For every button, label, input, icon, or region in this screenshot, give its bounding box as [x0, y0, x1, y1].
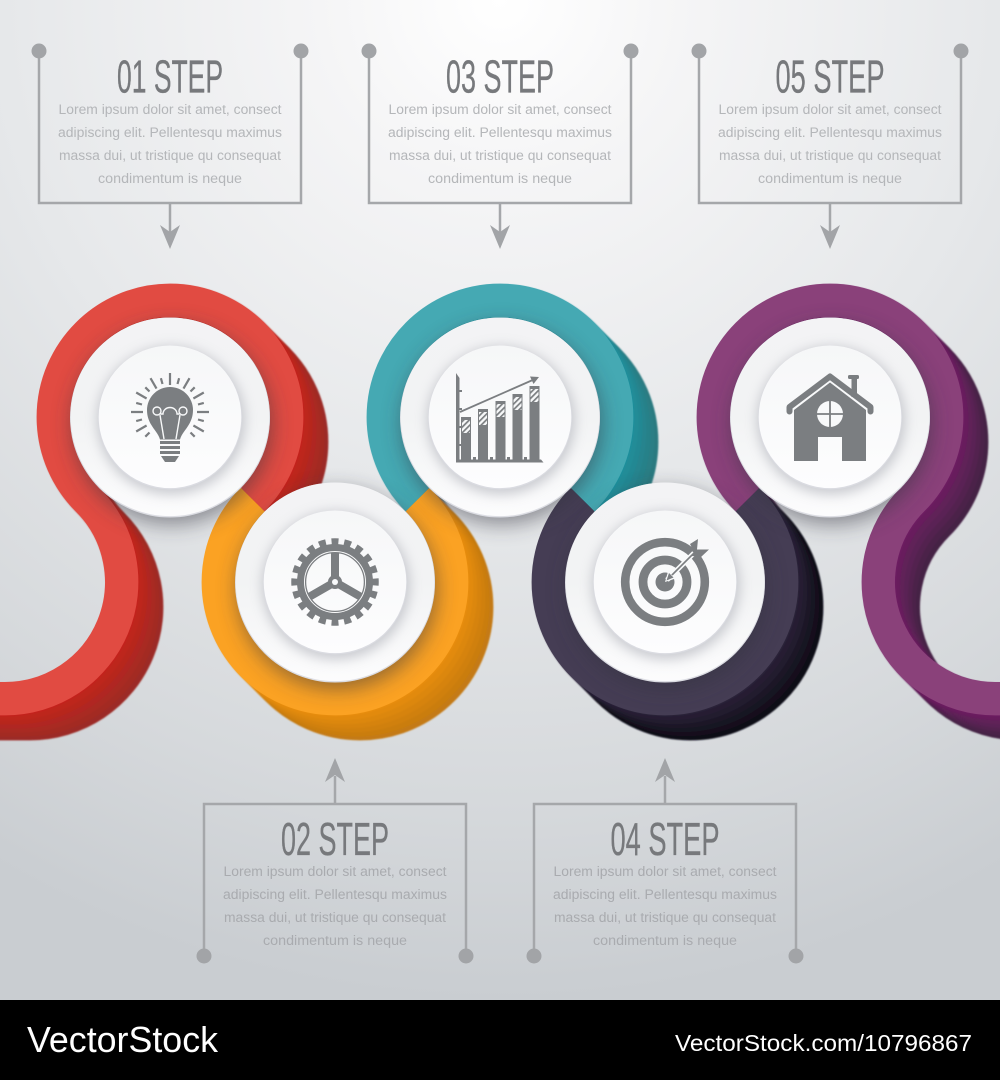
ribbon: orange — [218, 500, 452, 699]
callout: 04 step: adipiscing elit. Pellentesqu maximus — [553, 887, 777, 902]
extrusion: purple — [714, 301, 1000, 724]
callout: 03 step: Lorem ipsum dolor sit amet, consect — [388, 102, 612, 117]
callout: 01 step: adipiscing elit. Pellentesqu maximus — [58, 125, 282, 140]
extrusion: teal — [384, 301, 642, 524]
ribbon front faces — [0, 300, 1000, 699]
callout: 05 step — [692, 44, 968, 249]
disc: step 5 — [730, 318, 932, 524]
callout: 01 step: 01 STEP — [117, 50, 223, 102]
callout: 01 step: Lorem ipsum dolor sit amet, consect — [58, 102, 282, 117]
callout: 02 step — [196, 758, 474, 964]
callout: 02 step: Lorem ipsum dolor sit amet, consect — [224, 864, 447, 879]
callout: 03 step: adipiscing elit. Pellentesqu maximus — [388, 125, 612, 140]
callout: 03 step: 03 STEP — [446, 50, 554, 102]
footer bar — [0, 1000, 1000, 1080]
ribbon 3D extrusions — [0, 301, 1000, 724]
callout: 02 step: 02 STEP — [281, 813, 389, 865]
disc: step 1 — [70, 318, 272, 524]
callout: 02 step: massa dui, ut tristique qu consequat — [224, 910, 446, 925]
callout: 05 step: condimentum is neque — [758, 171, 902, 186]
callout: 01 step: condimentum is neque — [98, 171, 242, 186]
callout: 04 step — [526, 758, 804, 964]
icon: house — [790, 375, 870, 461]
extrusion: navy — [549, 500, 807, 724]
callout: 04 step: condimentum is neque — [593, 933, 737, 948]
callout: 03 step — [362, 44, 638, 249]
callout: 02 step: adipiscing elit. Pellentesqu maximus — [223, 887, 447, 902]
callout: 04 step: massa dui, ut tristique qu consequat — [554, 910, 776, 925]
ribbon: purple — [713, 300, 1000, 699]
callout: 03 step: massa dui, ut tristique qu consequat — [389, 148, 611, 163]
callout: 05 step: massa dui, ut tristique qu consequat — [719, 148, 941, 163]
callout: 05 step: 05 STEP — [776, 50, 884, 102]
ribbon: teal — [383, 300, 617, 500]
callout: 05 step: adipiscing elit. Pellentesqu maximus — [718, 125, 942, 140]
disc: step 2 — [235, 482, 437, 690]
ribbon: red — [0, 300, 287, 699]
icon: target with arrow — [625, 539, 709, 622]
callout: 01 step — [32, 44, 308, 249]
callout: 05 step: Lorem ipsum dolor sit amet, consect — [718, 102, 942, 117]
callout: 03 step: condimentum is neque — [428, 171, 572, 186]
ribbon: navy — [548, 500, 782, 699]
callout: 01 step: massa dui, ut tristique qu consequat — [59, 148, 281, 163]
icon: gear — [295, 542, 375, 622]
icon: bar chart — [456, 373, 544, 462]
footer bar: VectorStock.com/10796867 — [675, 1030, 972, 1056]
disc: step 4 — [565, 482, 767, 690]
callout: 02 step: condimentum is neque — [263, 933, 407, 948]
callout: 04 step: 04 STEP — [610, 813, 720, 865]
disc: step 3 — [400, 318, 602, 524]
icon: light bulb — [131, 373, 209, 462]
extrusion: orange — [219, 500, 477, 724]
footer bar: VectorStock — [27, 1019, 219, 1060]
extrusion: red — [0, 301, 312, 724]
callout: 04 step: Lorem ipsum dolor sit amet, consect — [554, 864, 777, 879]
